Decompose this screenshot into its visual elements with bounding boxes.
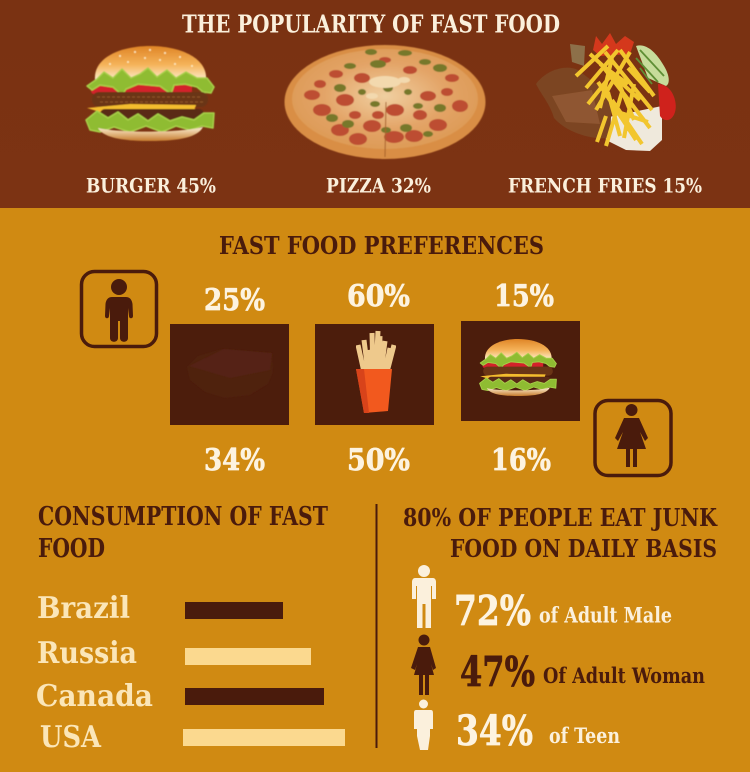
- icon: woman: [411, 634, 436, 695]
- male percent: fries: 60%: [347, 279, 410, 314]
- row: Russia: Russia: [37, 636, 137, 671]
- icon: teen: [414, 700, 433, 750]
- caption: Of Adult Woman: [543, 663, 705, 688]
- row: Brazil: [37, 591, 283, 626]
- female percent: burger: 16%: [491, 443, 551, 478]
- tile: burger: [461, 321, 580, 421]
- icon: french fries plate: [536, 33, 676, 151]
- bar chart: consumption by country: [36, 591, 345, 755]
- label: pizza: PIZZA 32%: [326, 174, 431, 198]
- stat: adult woman: [411, 634, 705, 696]
- female percent: fries: 50%: [347, 443, 410, 478]
- caption: of Teen: [549, 723, 620, 748]
- row: USA: [40, 720, 345, 755]
- row: Canada: Canada: [36, 679, 153, 714]
- title: THE POPULARITY OF FAST FOOD: [182, 10, 560, 38]
- female percent: sandwich: 34%: [204, 443, 265, 478]
- stat: teen: [414, 700, 620, 755]
- icon: female badge: [595, 400, 671, 476]
- value: 34%: [456, 707, 533, 755]
- tile: sandwich: [170, 324, 289, 425]
- icon: burger: [86, 46, 214, 141]
- panel: popularity header: [0, 0, 750, 208]
- icon: pizza: [284, 45, 486, 159]
- caption: of Adult Male: [539, 602, 672, 628]
- stat: adult male: [412, 565, 672, 635]
- row: Russia: [37, 636, 311, 671]
- heading: 80% of people eat junk food: [403, 503, 718, 563]
- heading: consumption of fast food: CONSUMPTION OF FAST: [38, 502, 329, 532]
- male percent: burger: 15%: [494, 279, 554, 314]
- label: french fries: FRENCH FRIES 15%: [508, 174, 702, 198]
- value: 72%: [454, 587, 531, 635]
- row: USA: USA: [40, 720, 102, 755]
- heading: consumption of fast food: [38, 502, 329, 564]
- row: Brazil: Brazil: [37, 591, 130, 626]
- heading: fast food preferences: FAST FOOD PREFERENCES: [219, 231, 544, 260]
- label: burger: BURGER 45%: [86, 174, 216, 198]
- row: Canada: [36, 679, 324, 714]
- icon: man: [412, 565, 436, 628]
- tile: fries box: [315, 324, 434, 425]
- heading: consumption of fast food: FOOD: [38, 534, 105, 564]
- value: 47%: [460, 648, 535, 696]
- icon: male badge: [82, 272, 156, 346]
- male percent: sandwich: 25%: [204, 283, 265, 318]
